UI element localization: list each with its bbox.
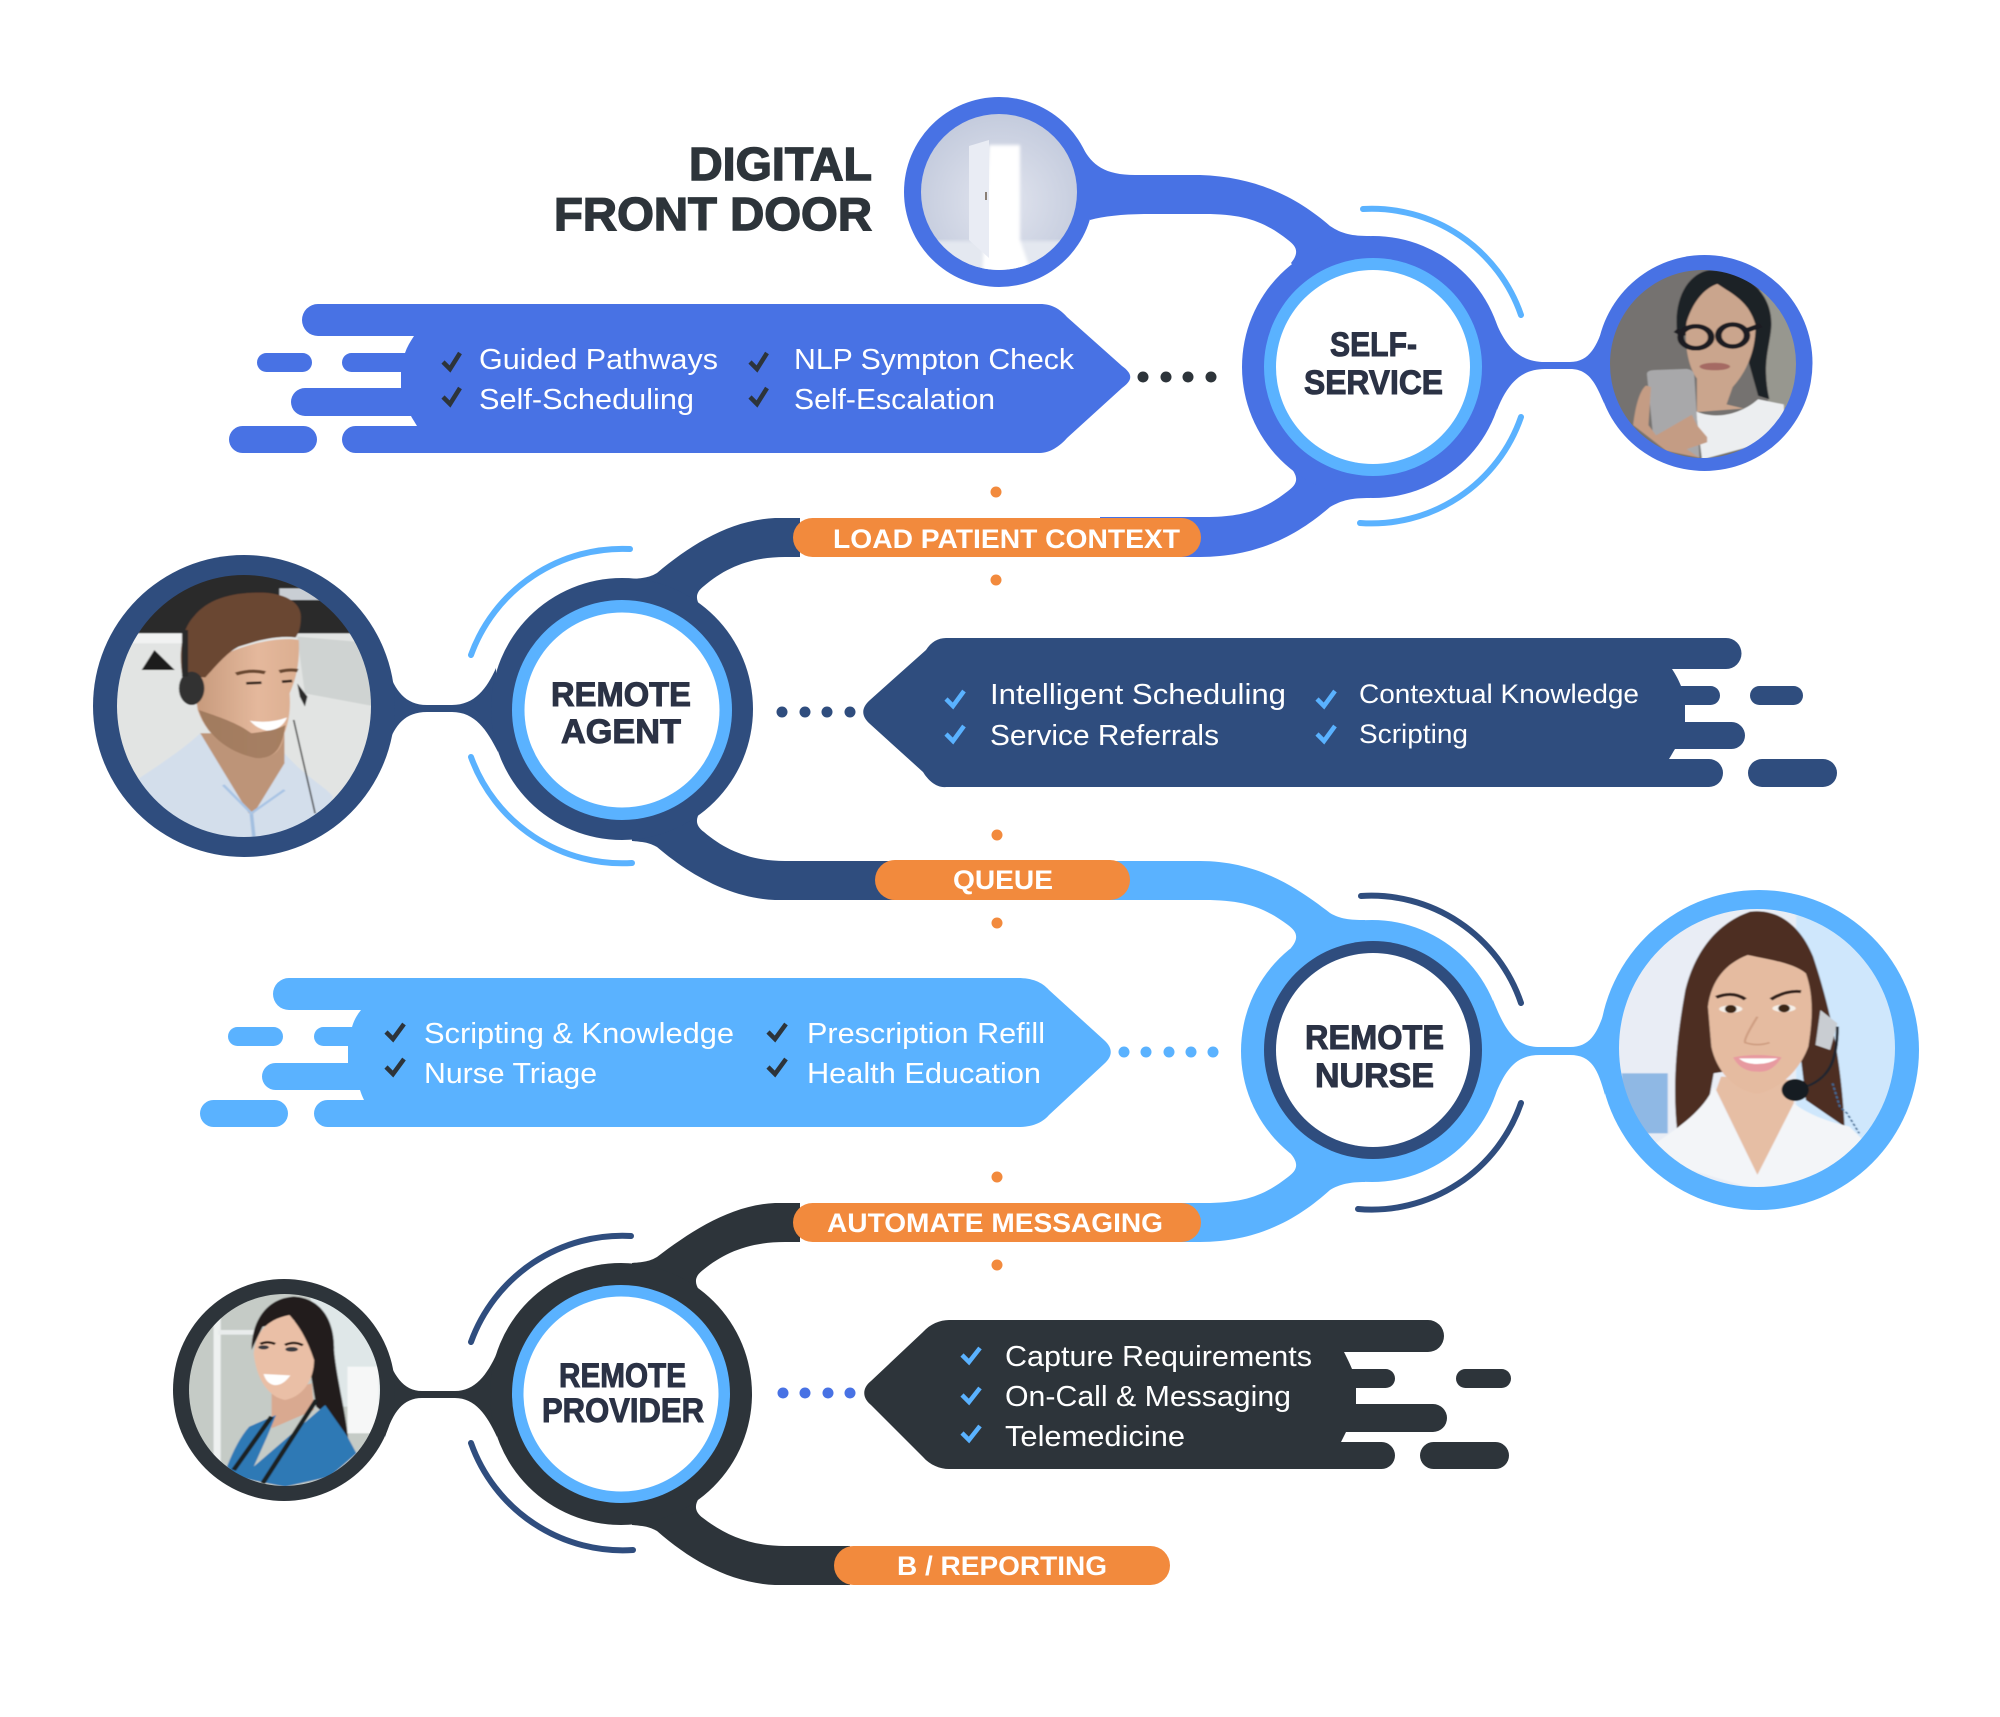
feature list: Telemedicine xyxy=(1005,1421,1185,1453)
panel: remote provider features xyxy=(864,1320,1511,1469)
pill: load patient context xyxy=(793,518,1201,557)
feature list: Nurse Triage xyxy=(424,1058,597,1090)
panel: remote agent features xyxy=(863,638,1837,787)
feature list: Scripting xyxy=(1359,719,1468,749)
shape: remote nurse arrow banner xyxy=(262,978,1111,1127)
pill: B / reporting xyxy=(834,1546,1170,1585)
photo: woman with phone xyxy=(1596,255,1812,471)
title: Digital Front Door xyxy=(554,138,872,240)
node: remote provider: REMOTE xyxy=(559,1357,686,1395)
feature list: Self-Escalation xyxy=(794,384,995,416)
dots: orange pair above and below load patient context xyxy=(990,486,1002,586)
stub: upper speed dash xyxy=(257,353,312,372)
node: remote agent xyxy=(491,578,753,840)
title: Digital Front Door: FRONT DOOR xyxy=(554,188,872,240)
dots: orange pair above and below automate messaging xyxy=(992,1172,1002,1270)
stub: upper speed dash xyxy=(228,1027,283,1046)
node: remote nurse: REMOTE xyxy=(1305,1019,1444,1057)
checks xyxy=(962,1348,980,1440)
icon: door circle xyxy=(904,97,1094,287)
photo: man with headset xyxy=(93,555,395,857)
node: remote agent: REMOTE xyxy=(551,676,691,714)
stub: lower speed dash xyxy=(1748,759,1837,787)
connector: agent top branch xyxy=(622,518,800,710)
stub: lower speed dash xyxy=(229,426,317,453)
feature list: Scripting & Knowledge xyxy=(424,1018,734,1050)
node: self-service xyxy=(1242,236,1504,498)
connector: nurse top branch xyxy=(1100,861,1373,1050)
pill: B / reporting: B / REPORTING xyxy=(897,1551,1107,1581)
feature list xyxy=(1005,1341,1312,1453)
dots: remote provider panel xyxy=(778,1388,856,1398)
feature list: Health Education xyxy=(807,1058,1041,1090)
stub: lower speed dash xyxy=(200,1100,288,1127)
dots: remote agent panel xyxy=(776,706,856,718)
arcs: remote agent xyxy=(471,549,632,863)
feature list: Guided Pathways xyxy=(479,344,718,376)
node: remote provider xyxy=(490,1263,752,1525)
photo: nurse with headset xyxy=(1599,890,1919,1210)
node: remote nurse: NURSE xyxy=(1315,1057,1434,1095)
shape: self-service arrow banner xyxy=(291,304,1130,453)
connector: agent to photo xyxy=(388,668,498,752)
connector: provider bottom branch xyxy=(621,1394,850,1585)
feature list: On-Call & Messaging xyxy=(1005,1381,1291,1413)
pill: load patient context: LOAD PATIENT CONTEXT xyxy=(833,524,1181,554)
connector: provider to photo xyxy=(385,1350,497,1437)
stub: upper speed dash xyxy=(1456,1369,1511,1388)
feature list xyxy=(990,679,1639,752)
connector: agent bottom branch xyxy=(622,710,900,900)
title: Digital Front Door: DIGITAL xyxy=(689,138,872,190)
connector: self-service to photo xyxy=(1495,320,1604,410)
arcs: self-service xyxy=(1360,209,1521,523)
shape: remote agent arrow banner xyxy=(863,638,1745,787)
checks xyxy=(386,1024,786,1074)
shape: remote provider arrow banner xyxy=(864,1320,1447,1469)
pill: queue xyxy=(875,860,1130,900)
feature list: Service Referrals xyxy=(990,720,1219,752)
pill: queue: QUEUE xyxy=(953,865,1053,895)
connector: nurse to photo xyxy=(1493,1000,1605,1100)
dots: remote nurse panel xyxy=(1118,1046,1218,1058)
dots: orange pair above and below queue xyxy=(992,830,1002,928)
feature list: Intelligent Scheduling xyxy=(990,679,1286,711)
node: remote provider: PROVIDER xyxy=(542,1392,704,1430)
feature list xyxy=(479,344,1075,416)
connector: nurse bottom branch xyxy=(1180,1050,1373,1242)
feature list xyxy=(424,1018,1045,1090)
panel: self-service features xyxy=(229,304,1130,453)
connector: provider top branch xyxy=(621,1203,800,1394)
connector: door to self-service xyxy=(1083,148,1373,367)
stub: lower speed dash xyxy=(1420,1442,1509,1469)
panel: remote nurse features xyxy=(200,978,1111,1127)
feature list: Capture Requirements xyxy=(1005,1341,1312,1373)
connector: self-service to load patient context xyxy=(1100,367,1373,557)
feature list: NLP Sympton Check xyxy=(794,344,1075,376)
node: self-service: SERVICE xyxy=(1304,364,1443,402)
feature list: Prescription Refill xyxy=(807,1018,1045,1050)
pill: automate messaging xyxy=(793,1203,1201,1242)
node: self-service: SELF- xyxy=(1330,326,1417,364)
photo: provider with stethoscope xyxy=(173,1279,395,1501)
pill: automate messaging: AUTOMATE MESSAGING xyxy=(827,1208,1163,1238)
checks xyxy=(443,353,767,404)
arcs: remote nurse xyxy=(1358,896,1521,1210)
checks xyxy=(946,691,1335,741)
node: remote agent: AGENT xyxy=(561,713,681,751)
stub: upper speed dash xyxy=(1750,686,1803,705)
node: remote nurse xyxy=(1241,920,1503,1182)
dots: self-service panel xyxy=(1138,372,1216,382)
feature list: Self-Scheduling xyxy=(479,384,694,416)
feature list: Contextual Knowledge xyxy=(1359,679,1639,709)
arcs: remote provider xyxy=(471,1236,633,1550)
